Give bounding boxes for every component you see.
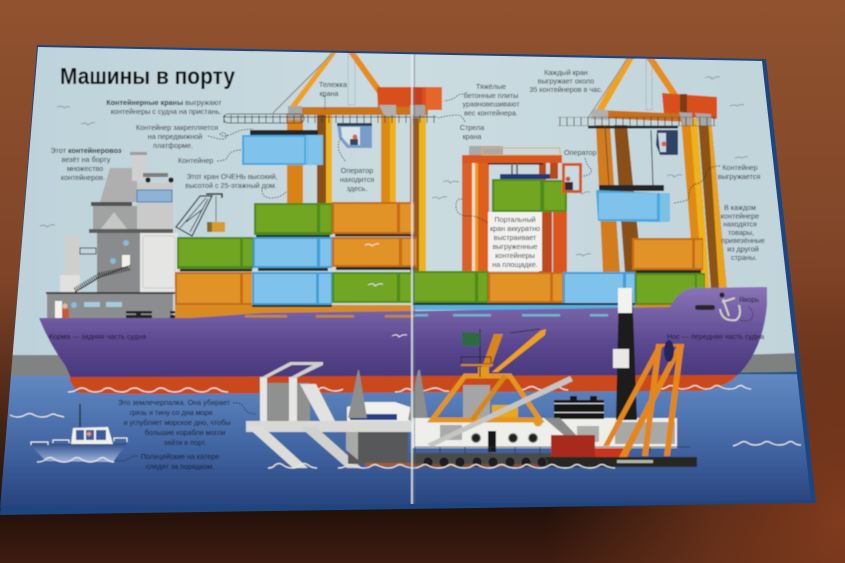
upper tower	[89, 152, 173, 233]
container: blue row 2	[253, 237, 332, 268]
callout: counterweights	[444, 94, 463, 101]
operator cab	[337, 123, 372, 148]
text: counterweights: Тяжёлые	[476, 82, 506, 91]
text: stern: Корма — задняя часть судна	[49, 332, 146, 341]
text: operator: Оператор	[341, 166, 373, 175]
boom	[558, 117, 716, 128]
callout: portal crane	[456, 199, 488, 223]
panel: sky	[12, 47, 795, 356]
text: container cranes: контейнеры с судна на пристань.	[111, 107, 221, 116]
text: bow: Нос — передняя часть судна	[667, 332, 764, 341]
text: unloading rate: выгружает около	[538, 76, 594, 86]
container: blue row 3	[252, 272, 332, 305]
text: goods: из другой	[727, 244, 759, 254]
lower deck	[46, 292, 176, 319]
callout: container unloading	[674, 166, 720, 203]
container: orange row 3	[175, 272, 253, 305]
ship superstructure	[46, 152, 178, 319]
text: unloading rate: 35 контейнеров в час.	[529, 85, 603, 94]
callout: operator right	[583, 158, 591, 176]
text: counterweights: уравновешивают	[462, 100, 520, 109]
text: counterweights: бетонные плиты	[464, 91, 518, 100]
dredger A-frames	[603, 340, 684, 457]
callout: police	[116, 456, 137, 461]
container: green far right	[635, 273, 705, 305]
icon: white gulls on hull	[365, 244, 407, 337]
text: container: Контейнер	[178, 156, 213, 165]
text: police: следят за порядком.	[146, 462, 214, 471]
callout: container fixed	[208, 129, 253, 139]
crane: right container crane	[558, 55, 727, 290]
text: goods: страны.	[731, 253, 757, 262]
anchor label: Якорь	[739, 295, 759, 304]
text: boom: крана	[462, 132, 482, 141]
dredger cabin and towers	[346, 370, 428, 466]
crane legs	[287, 113, 426, 273]
dredger stack	[554, 288, 637, 420]
bridge windows	[110, 177, 174, 267]
text: container unloading: выгружается	[718, 172, 760, 181]
text: portal crane	[488, 212, 542, 271]
text: dredger: грязь и тину со дна моря	[130, 408, 213, 417]
boat waves	[37, 458, 114, 462]
hull body	[39, 287, 767, 392]
text: container ship: везёт на борту	[61, 155, 111, 164]
text: crane height: высотой с 25-этажный дом.	[185, 181, 277, 190]
waves on hull line	[68, 386, 751, 392]
callout: operator	[338, 138, 345, 161]
beam	[590, 109, 711, 126]
crane boom	[223, 114, 437, 123]
text: unloading rate: Каждый кран	[544, 68, 588, 77]
callout: dredger	[233, 403, 256, 414]
book spine	[411, 47, 415, 507]
icon: hawsepipe	[695, 305, 715, 310]
anchor label	[720, 292, 759, 321]
cargo ship hull	[39, 244, 767, 394]
waves at front of dredger and sea	[268, 464, 615, 468]
callout: crane height	[262, 190, 286, 198]
bollards	[126, 310, 176, 319]
title: Машины в порту	[60, 63, 235, 89]
text: container ship: контейнеров.	[61, 173, 105, 182]
dredger flag	[461, 329, 493, 377]
container: orange row 2	[332, 237, 417, 267]
lower tower	[97, 233, 178, 293]
hanging container	[596, 126, 670, 222]
counterweight	[662, 93, 717, 119]
red waterline	[69, 375, 738, 394]
container: orange row 1	[332, 202, 415, 234]
container shadows and lower row	[175, 234, 701, 320]
text: container unloading: Контейнер	[722, 163, 758, 172]
crane: left container crane	[223, 48, 442, 273]
boat rails	[31, 438, 127, 445]
police boat	[29, 404, 127, 462]
legs	[596, 118, 727, 290]
text: portal crane: на площадке.	[492, 260, 538, 269]
operator cab	[562, 163, 582, 193]
callout: container	[217, 150, 241, 161]
text: goods: привезённые	[721, 236, 765, 245]
legs and gantry	[462, 146, 567, 272]
text: container fixed: Контейнер закрепляется	[136, 123, 218, 132]
container: orange right page	[488, 272, 563, 303]
callout: trolley	[324, 96, 326, 110]
text: container fixed: на передвижной	[148, 132, 202, 141]
container: green row 2	[177, 237, 253, 269]
green container	[492, 179, 567, 212]
spreader and blue container	[242, 130, 323, 165]
text: container fixed: платформе.	[153, 141, 193, 150]
text: container ship: множество	[67, 164, 103, 173]
container: blue right page	[563, 272, 635, 305]
text: trolley: Тележка	[319, 80, 347, 89]
text: portal crane: выгруженные	[492, 242, 538, 251]
boat cabin	[71, 404, 113, 444]
icon: seagulls	[40, 77, 748, 256]
text: goods: контейнере	[721, 211, 759, 220]
text: dredger: большие корабли могли	[145, 428, 225, 437]
container: green row 1	[254, 203, 332, 235]
text: goods: товары,	[728, 228, 754, 237]
text: crane height: Этот кран ОЧЕНЬ высокий,	[186, 172, 278, 181]
dredger hull and rails	[410, 418, 697, 467]
text: dredger: зайти в порт.	[164, 438, 206, 447]
dredger	[246, 288, 697, 468]
text: operator: находится	[340, 175, 374, 184]
text: trolley: крана	[319, 89, 339, 98]
panel: sea	[0, 353, 845, 514]
dredger bridge block	[544, 418, 629, 457]
text: portal crane: контейнеры	[495, 251, 535, 260]
funnel and stairs	[60, 235, 131, 293]
container: green row 3	[332, 272, 413, 303]
cab	[656, 130, 678, 155]
counterweight	[377, 87, 442, 110]
text: dredger: Это землечерпалка. Она убирает	[118, 398, 230, 407]
container: orange stacked right	[632, 238, 703, 270]
trolley	[488, 163, 550, 179]
crane: portal crane	[462, 146, 582, 272]
text: counterweights: вес контейнера.	[464, 108, 518, 117]
text: container cranes: Контейнерные краны выгружают	[106, 98, 222, 107]
icon: anchor	[720, 298, 740, 320]
text: goods: В каждом	[724, 203, 756, 212]
text: operator right: Оператор	[564, 148, 597, 157]
crane beam	[288, 105, 428, 120]
dredger tyres	[423, 457, 547, 467]
text: container ship: Этот контейнеровоз	[50, 146, 122, 155]
text: portal crane: выстраивает	[494, 233, 537, 242]
text: portal crane: кран аккуратно	[490, 224, 540, 233]
isolated waves	[10, 414, 801, 446]
text: police: Полицейские на катере	[141, 452, 219, 461]
dredger rear frame	[246, 362, 414, 468]
text: portal crane: Портальный	[494, 215, 536, 224]
container: green right page	[412, 271, 488, 303]
text: operator: здесь.	[347, 184, 367, 193]
dredger crane	[432, 329, 546, 426]
callout: boom	[438, 115, 465, 122]
dredger boom	[427, 376, 573, 447]
A-frame	[588, 58, 678, 118]
text: boom: Стрела	[460, 123, 484, 132]
text: dredger: и углубляет морское дно, чтобы	[123, 418, 231, 427]
ship crane	[176, 194, 225, 236]
containers on deck	[175, 202, 705, 320]
deck ports	[245, 314, 608, 318]
crane A-frame	[272, 52, 381, 114]
text: goods: находятся	[723, 220, 757, 229]
boat hull	[29, 443, 127, 462]
